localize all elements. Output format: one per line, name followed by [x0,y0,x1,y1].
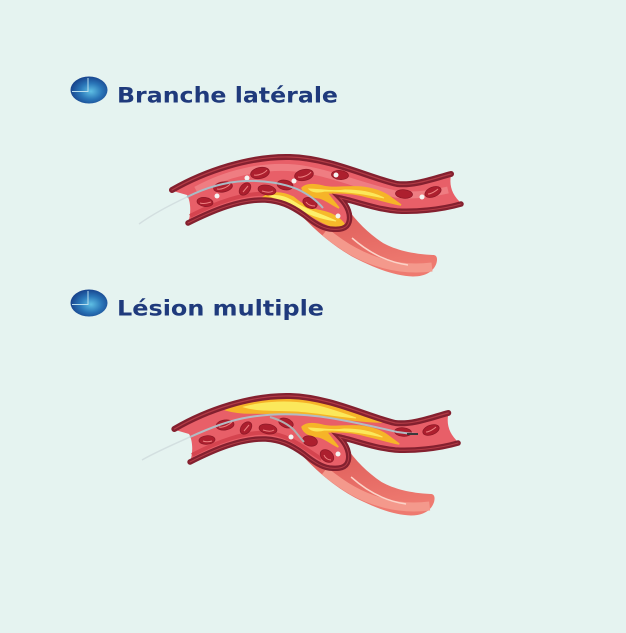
side branch [300,208,437,276]
heading: Branche latérale: Branche latérale [117,84,338,108]
icon: blue disc, second heading [70,290,108,316]
heading: Lésion multiple: Lésion multiple [117,296,324,320]
lumen highlight [196,167,448,195]
plaque: upper [302,185,401,208]
illustration: artery with side branch lesion [139,157,462,276]
red blood cells [199,416,441,465]
vessel walls [172,157,461,229]
blood cell highlights [203,422,436,460]
inner wall shade [190,194,322,220]
icon: blue disc, first heading [70,76,108,104]
plaque: branch carina [302,424,399,447]
vessel walls [174,396,458,468]
side branch [300,447,435,516]
guide wire outside the vessel [142,437,190,460]
white cells [214,172,424,218]
guide wire outside the vessel [139,197,187,224]
illustration: artery with multiple lesions [142,396,459,516]
plaque: upper wall [226,398,382,422]
inner wall shade [192,433,322,459]
vessel lumen [175,397,459,468]
plaque: lower [262,193,346,228]
blood cell highlights [200,170,438,206]
guide wire inside the vessel [187,181,323,208]
white cells [288,434,340,456]
guide wires inside the vessel [190,414,418,442]
vessel lumen [173,158,462,229]
red blood cells [196,166,443,211]
